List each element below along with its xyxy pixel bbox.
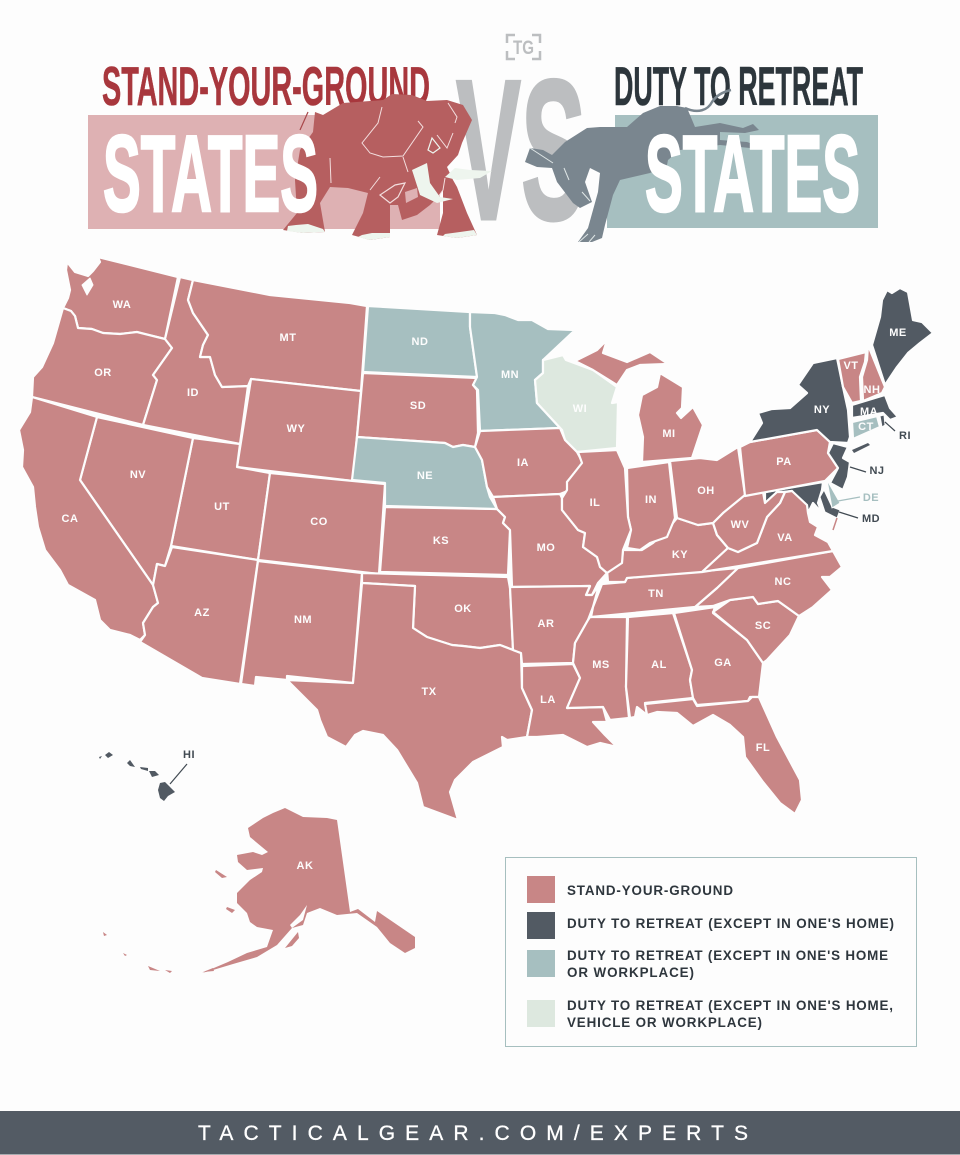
state: SC: [713, 597, 799, 663]
state: MO: MO: [537, 542, 555, 554]
state: MO: [493, 494, 607, 595]
state: NC: NC: [775, 576, 791, 588]
state: PA: [740, 430, 838, 496]
state: WA: WA: [113, 299, 131, 311]
state: WY: WY: [287, 423, 306, 435]
legend item: duty to retreat, home, vehicle or workplace: VEHICLE OR WORKPLACE): [567, 1015, 762, 1030]
state: TX: [287, 583, 532, 820]
state: IL: IL: [590, 497, 600, 509]
state: KY: [607, 518, 728, 582]
map of the United States: [19, 257, 933, 973]
state: CT: CT: [858, 421, 874, 433]
footer bar: [0, 1111, 960, 1154]
state: PA: PA: [776, 456, 792, 468]
state: MD: [765, 482, 840, 518]
state: ND: ND: [412, 336, 428, 348]
state: GA: GA: [714, 657, 732, 669]
state: SC: SC: [755, 620, 771, 632]
state: ME: [872, 288, 933, 385]
state: MN: [470, 312, 575, 431]
legend item: duty to retreat, home or workplace: DUTY TO RETREAT (EXCEPT IN ONE'S HOME: [567, 948, 888, 963]
state: CO: CO: [310, 516, 328, 528]
state: DE: [827, 480, 879, 508]
state: OR: OR: [94, 367, 112, 379]
state: MS: [567, 617, 629, 720]
state: WV: [713, 483, 785, 552]
panel: teal states banner: [607, 115, 878, 228]
state: CA: [19, 397, 158, 640]
state: MI: MI: [662, 428, 676, 440]
state: IN: IN: [645, 494, 657, 506]
icon: elephant: [283, 94, 492, 240]
state: MA: [852, 395, 898, 420]
state: NY: [750, 358, 870, 453]
legend: [506, 858, 916, 1046]
state: AR: [510, 585, 599, 664]
state: MS: MS: [592, 659, 610, 671]
state: HI: HI: [183, 749, 195, 761]
state: NH: NH: [864, 384, 880, 396]
state: CO: [258, 473, 385, 574]
legend item: duty to retreat, home or workplace: OR WORKPLACE): [567, 965, 694, 980]
state: MT: [188, 280, 367, 391]
state: UT: UT: [214, 501, 230, 513]
legend item: stand-your-ground: STAND-YOUR-GROUND: [567, 883, 733, 898]
state: MT: MT: [280, 332, 296, 344]
header: [88, 35, 878, 262]
state: IN: [627, 462, 675, 550]
state: NM: NM: [294, 614, 312, 626]
state: VA: VA: [777, 532, 793, 544]
state: TX: TX: [421, 686, 437, 698]
state: AZ: AZ: [194, 607, 210, 619]
state: AK: [103, 808, 415, 973]
footer bar: TACTICALGEAR.COM/EXPERTS: [198, 1122, 748, 1145]
state: ND: [363, 306, 477, 377]
state: AR: AR: [538, 618, 554, 630]
state: DE: DE: [863, 492, 879, 504]
state: TN: [591, 568, 738, 617]
state: RI: [880, 415, 911, 442]
state: KS: [380, 507, 510, 575]
state: OK: [362, 573, 513, 650]
legend item: duty to retreat, home: DUTY TO RETREAT (EXCEPT IN ONE'S HOME): [567, 916, 894, 931]
state: NM: [241, 561, 362, 686]
state: MN: MN: [501, 369, 519, 381]
state: WV: WV: [731, 519, 750, 531]
state: RI: RI: [899, 430, 911, 442]
state: NV: [80, 417, 193, 585]
state: SD: SD: [410, 400, 426, 412]
state: ID: ID: [187, 387, 199, 399]
state: AL: [626, 613, 693, 718]
state: WI: WI: [573, 403, 587, 415]
state: LA: [522, 664, 617, 747]
state: VT: [838, 352, 866, 403]
state: LA: LA: [540, 694, 556, 706]
state: VT: VT: [843, 360, 859, 372]
state: NE: [352, 437, 497, 509]
state: SD: [357, 373, 478, 447]
legend item: duty to retreat, home, vehicle or workplace: [527, 998, 893, 1030]
legend item: duty to retreat, home, vehicle or workplace: DUTY TO RETREAT (EXCEPT IN ONE'S HOME,: [567, 998, 893, 1013]
logo: TG: [507, 35, 540, 59]
logo: TG: TG: [513, 38, 534, 59]
state: FL: [645, 697, 802, 814]
state: TN: TN: [648, 588, 664, 600]
heading: stand-your-ground: STAND-YOUR-GROUND: [102, 55, 430, 117]
state: OH: OH: [697, 485, 715, 497]
state: GA: [674, 607, 763, 705]
state: CT: [852, 416, 880, 439]
state: WA: [63, 257, 178, 339]
state: FL: FL: [756, 742, 770, 754]
state: NY: NY: [814, 404, 830, 416]
state: MI: [575, 340, 703, 462]
state: HI: [99, 749, 195, 801]
label: MD: MD: [862, 513, 880, 525]
state: NJ: [828, 443, 885, 490]
state: NE: NE: [417, 470, 433, 482]
icon: donkey: [525, 90, 762, 242]
state: ME: ME: [889, 327, 907, 339]
legend item: stand-your-ground: [527, 876, 733, 903]
legend item: duty to retreat, home or workplace: [527, 948, 888, 980]
state: OR: [32, 308, 172, 425]
panel: pink states banner: [88, 115, 440, 229]
state: ID: [143, 277, 248, 444]
label: MD: [839, 512, 880, 525]
state: AL: AL: [651, 659, 667, 671]
state: KS: KS: [433, 535, 449, 547]
state: IA: [475, 428, 583, 497]
state: AK: AK: [297, 860, 313, 872]
state: MA: MA: [860, 406, 878, 418]
header: VS: [456, 39, 586, 262]
state: AZ: [140, 547, 258, 684]
state: UT: [171, 438, 270, 560]
state: IL: [562, 450, 631, 573]
state: WY: [237, 379, 361, 481]
state: IA: IA: [517, 457, 529, 469]
state: NC: [695, 551, 842, 616]
legend item: duty to retreat, home: [527, 912, 894, 939]
text: states left: STATES: [103, 113, 318, 235]
state: NV: NV: [130, 469, 146, 481]
state: NJ: NJ: [869, 465, 885, 477]
state: OH: [670, 447, 745, 525]
state: WI: [535, 355, 618, 452]
state: VA: [702, 491, 837, 572]
state: NH: [862, 345, 885, 401]
state: CA: CA: [62, 513, 78, 525]
state: OK: OK: [454, 603, 472, 615]
state: KY: KY: [672, 549, 688, 561]
